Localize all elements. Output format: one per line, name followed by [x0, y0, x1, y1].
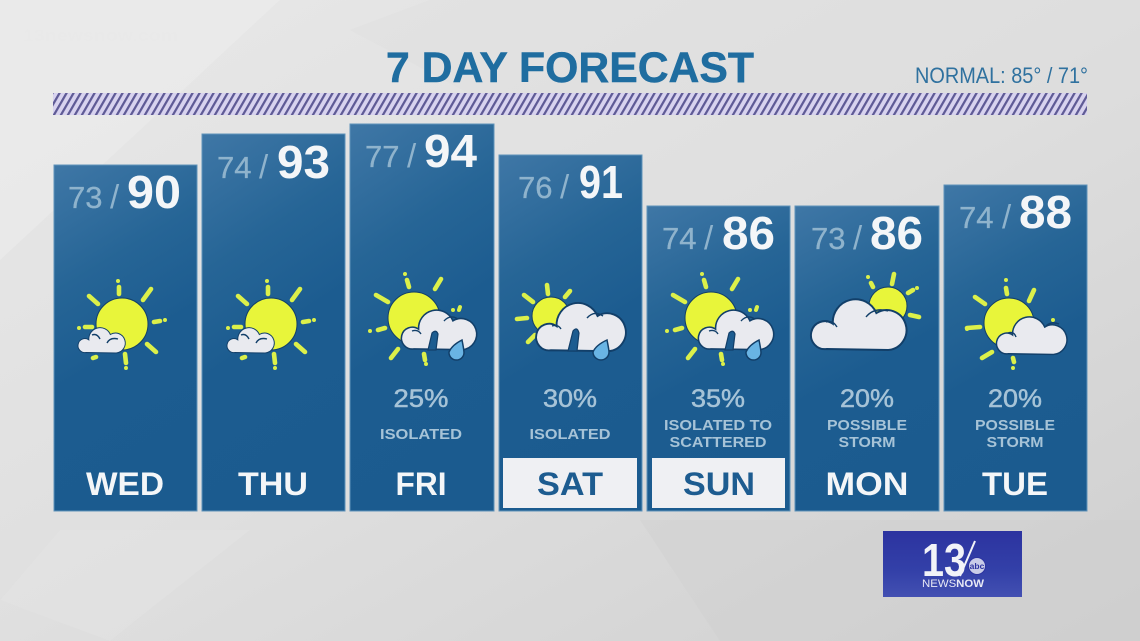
panel: Friday: / [407, 137, 417, 174]
panel: Wednesday: WED [86, 466, 164, 502]
panel: Monday: 86 [870, 207, 923, 259]
panel: Sunday: ISOLATED TO [664, 417, 772, 434]
icon: rain drop [746, 340, 761, 360]
icon: lightning notch [725, 331, 735, 350]
panel: Thursday: THU [238, 466, 308, 502]
panel: Friday: 25% [394, 385, 448, 413]
day box: Sunday: SUN [683, 466, 755, 502]
hatched divider bar [53, 93, 1087, 115]
normal temperatures: NORMAL: 85° / 71° [915, 63, 1088, 88]
logo: 13 News Now: 13 [922, 534, 966, 586]
panel: Wednesday [54, 165, 197, 511]
title: 7 DAY FORECAST [386, 44, 754, 92]
panel: Saturday: 30% [543, 385, 597, 413]
panel: Friday: 94 [424, 125, 477, 177]
panel: Monday: MON [826, 466, 908, 502]
panel: Friday: FRI [396, 466, 446, 502]
panel: Monday: STORM [838, 434, 896, 451]
panel: Wednesday: / [110, 178, 120, 215]
day box: Saturday [503, 458, 637, 508]
watermark: 13newsnow.com [23, 26, 178, 45]
icon: sun with small cloud [78, 281, 165, 368]
panel: Tuesday: STORM [986, 434, 1044, 451]
panel: Friday: ISOLATED [380, 426, 462, 443]
panel: Sunday: 86 [722, 207, 775, 259]
icon: sun with cloud [967, 280, 1067, 368]
panel: Thursday: / [259, 148, 269, 185]
panel: Friday: 77 [365, 139, 399, 174]
icon: rain drop [593, 340, 609, 360]
icon: cloud with sun behind [811, 274, 919, 350]
icon: sun with storm cloud [517, 285, 626, 360]
panel: Tuesday: 88 [1019, 186, 1072, 238]
panel: Sunday: 35% [691, 385, 745, 413]
panel: Friday [350, 124, 494, 511]
icon: sun with storm cloud [667, 274, 774, 364]
panel: Tuesday [944, 185, 1087, 511]
panel: Sunday: 74 [662, 221, 696, 256]
panel: Thursday [202, 134, 345, 511]
icon: sun with small cloud [227, 281, 314, 368]
panel: Monday: 20% [840, 385, 894, 413]
panel: Tuesday: POSSIBLE [975, 417, 1055, 434]
panel: Thursday: 93 [277, 136, 330, 188]
icon: rain drop [449, 340, 464, 360]
panel: Monday: 73 [811, 221, 845, 256]
panel: Sunday: SCATTERED [670, 434, 767, 451]
panel: Tuesday: 20% [988, 385, 1042, 413]
panel: Wednesday: 90 [127, 166, 181, 218]
logo: 13 News Now: abc [970, 561, 985, 571]
icon: sun with storm cloud [370, 274, 477, 364]
panel: Monday [795, 206, 939, 511]
icon: lightning notch [568, 329, 579, 351]
icon: lightning notch [428, 331, 438, 350]
panel: Saturday: 91 [579, 156, 623, 208]
panel: Wednesday: 73 [68, 180, 102, 215]
panel: Saturday: / [560, 168, 570, 205]
day box: Saturday: SAT [537, 466, 603, 502]
panel: Monday: / [853, 219, 863, 256]
panel: Tuesday: 74 [959, 200, 993, 235]
panel: Saturday [499, 155, 642, 511]
logo: 13 News Now [883, 531, 1022, 597]
panel: Monday: POSSIBLE [827, 417, 907, 434]
panel: Sunday [647, 206, 790, 511]
panel: Thursday: 74 [217, 150, 251, 185]
logo: 13 News Now: NEWSNOW [922, 578, 985, 590]
panel: Tuesday: TUE [982, 466, 1048, 502]
panel: Sunday: / [704, 219, 714, 256]
panel: Saturday: 76 [518, 170, 552, 205]
day box: Sunday [652, 458, 785, 508]
panel: Tuesday: / [1002, 198, 1012, 235]
panel: Saturday: ISOLATED [530, 426, 611, 443]
